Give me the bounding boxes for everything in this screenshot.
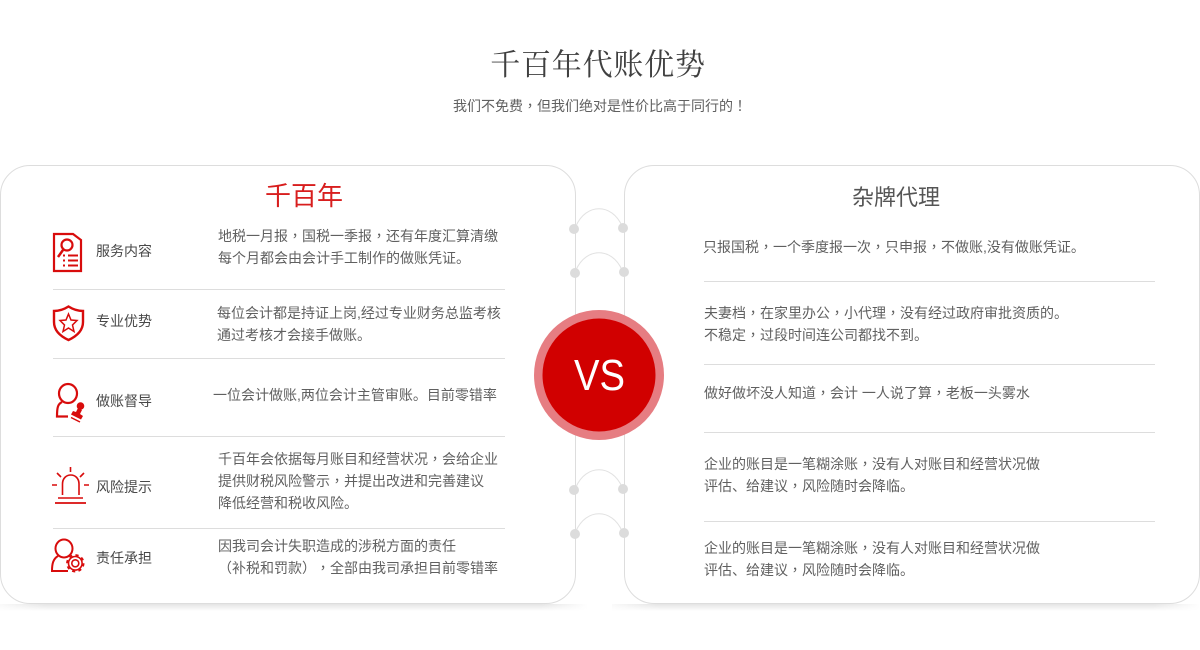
- label: 服务内容: 服务内容: [96, 243, 152, 259]
- text: 服务内容: 地税一月报，国税一季报，还有年度汇算清缴: [218, 226, 498, 246]
- text: 风险提示: [218, 449, 498, 511]
- text: 账目糊涂账 1: 评估、给建议，风险随时会降临。: [704, 476, 914, 496]
- text: 服务内容: 每个月都会由会计手工制作的做账凭证。: [218, 250, 470, 266]
- text: 做好做坏: 做好做坏没人知道，会计 一人说了算，老板一头雾水: [704, 383, 1030, 403]
- text: 风险提示: 千百年会依据每月账目和经营状况，会给企业: [218, 449, 498, 469]
- label: 责任承担: 责任承担: [96, 550, 152, 566]
- text: 风险提示: 提供财税风险警示，并提出改进和完善建议: [218, 471, 484, 491]
- text: 责任承担: （补税和罚款），全部由我司承担目前零错率: [218, 558, 498, 578]
- text: 账目糊涂账 1: [704, 454, 1040, 496]
- heading: 杂牌代理: 杂牌代理: [852, 185, 940, 210]
- panel: 千百年: [0, 165, 576, 604]
- label: 专业优势: 专业优势: [96, 313, 152, 329]
- text: 责任承担: [218, 538, 498, 578]
- text: 专业优势: 每位会计都是持证上岗,经过专业财务总监考核: [217, 305, 501, 321]
- panel: 杂牌代理: [624, 165, 1200, 604]
- text: 责任承担: 因我司会计失职造成的涉税方面的责任: [218, 538, 456, 554]
- text: 账目糊涂账 2: [704, 538, 1040, 580]
- text: 专业优势: [217, 305, 501, 343]
- text: 夫妻档: 不稳定，过段时间连公司都找不到。: [704, 325, 928, 345]
- text: 夫妻档: 夫妻档，在家里办公，小代理，没有经过政府审批资质的。: [704, 303, 1068, 323]
- text: 账目糊涂账 1: 企业的账目是一笔糊涂账，没有人对账目和经营状况做: [704, 454, 1040, 474]
- label: 做账督导: 做账督导: [96, 393, 152, 409]
- text: 风险提示: 降低经营和税收风险。: [218, 495, 358, 511]
- text: 专业优势: 通过考核才会接手做账。: [217, 327, 371, 343]
- text: 服务内容: [218, 226, 498, 266]
- text: 账目糊涂账 2: 评估、给建议，风险随时会降临。: [704, 560, 914, 580]
- title: 千百年代账优势: [490, 49, 706, 82]
- text: 账目糊涂账 2: 企业的账目是一笔糊涂账，没有人对账目和经营状况做: [704, 538, 1040, 558]
- text: 做账督导: 一位会计做账,两位会计主管审账。目前零错率: [213, 387, 497, 403]
- text: 只报国税: 只报国税，一个季度报一次，只申报，不做账,没有做账凭证。: [703, 237, 1085, 257]
- VS badge: VS: [574, 351, 625, 400]
- text: 夫妻档: [704, 303, 1068, 345]
- label: 风险提示: 风险提示: [96, 479, 152, 495]
- heading: 千百年: 千百年: [265, 181, 343, 211]
- subtitle: 我们不免费，但我们绝对是性价比高于同行的！: [453, 96, 747, 116]
